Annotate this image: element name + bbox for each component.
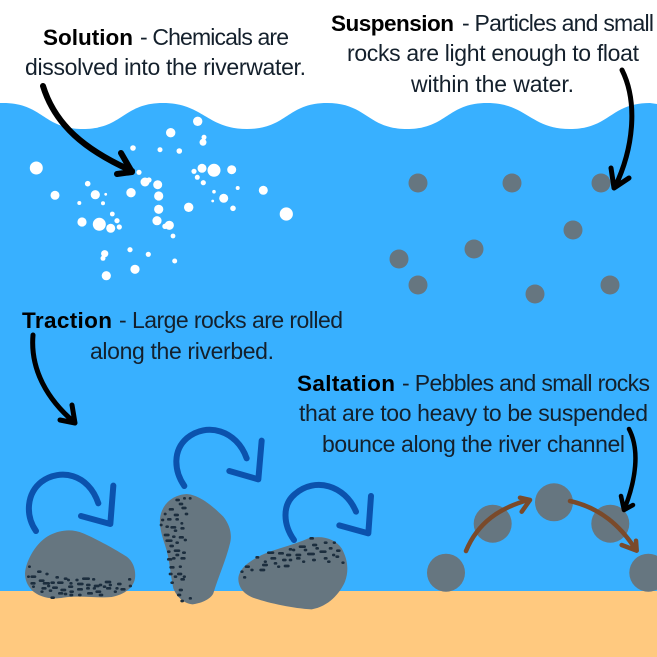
text: solution: Solution [43,25,133,50]
river water with wavy surface [0,103,657,591]
text: solution [25,24,306,80]
text: saltation: Saltation [297,371,395,396]
text: solution: dissolved into the riverwater. [25,54,306,80]
rock 1 [25,530,135,598]
rock 3 [238,537,347,609]
text: suspension: rocks are light enough to float [347,40,640,66]
traction: rolling rocks [25,494,347,609]
rotation arrow 2 [176,430,262,486]
solution: dissolved chemical bubbles [30,117,293,280]
text: traction: along the riverbed. [90,338,274,364]
text: traction [22,307,343,364]
text: traction: Traction [22,308,112,333]
river bed sand [0,591,657,657]
text: saltation: bounce along the river channel [322,431,625,457]
arrow: solution pointer [43,86,132,174]
text: traction: - Large rocks are rolled [119,307,343,333]
text: suspension: - Particles and small [462,10,654,36]
text: solution: - Chemicals are [140,24,289,50]
rock 2 [160,494,231,604]
text: suspension: Suspension [331,11,454,36]
arrow: first bounce [466,498,530,551]
rotation arrows [29,430,371,540]
text: suspension [331,10,654,97]
arrow: traction pointer [33,335,75,423]
rotation arrow 3 [285,485,371,540]
rotation arrow 1 [29,475,113,531]
saltation: bouncing rocks [427,483,657,592]
arrow: second bounce [570,501,637,551]
text: saltation: - Pebbles and small rocks [402,370,650,396]
text: saltation [297,370,650,457]
arrow: saltation pointer [621,429,635,510]
suspension: floating particles [390,174,620,304]
text: saltation: that are too heavy to be suspended [299,400,648,426]
arrow: suspension pointer [611,70,632,188]
text: suspension: within the water. [410,71,574,97]
